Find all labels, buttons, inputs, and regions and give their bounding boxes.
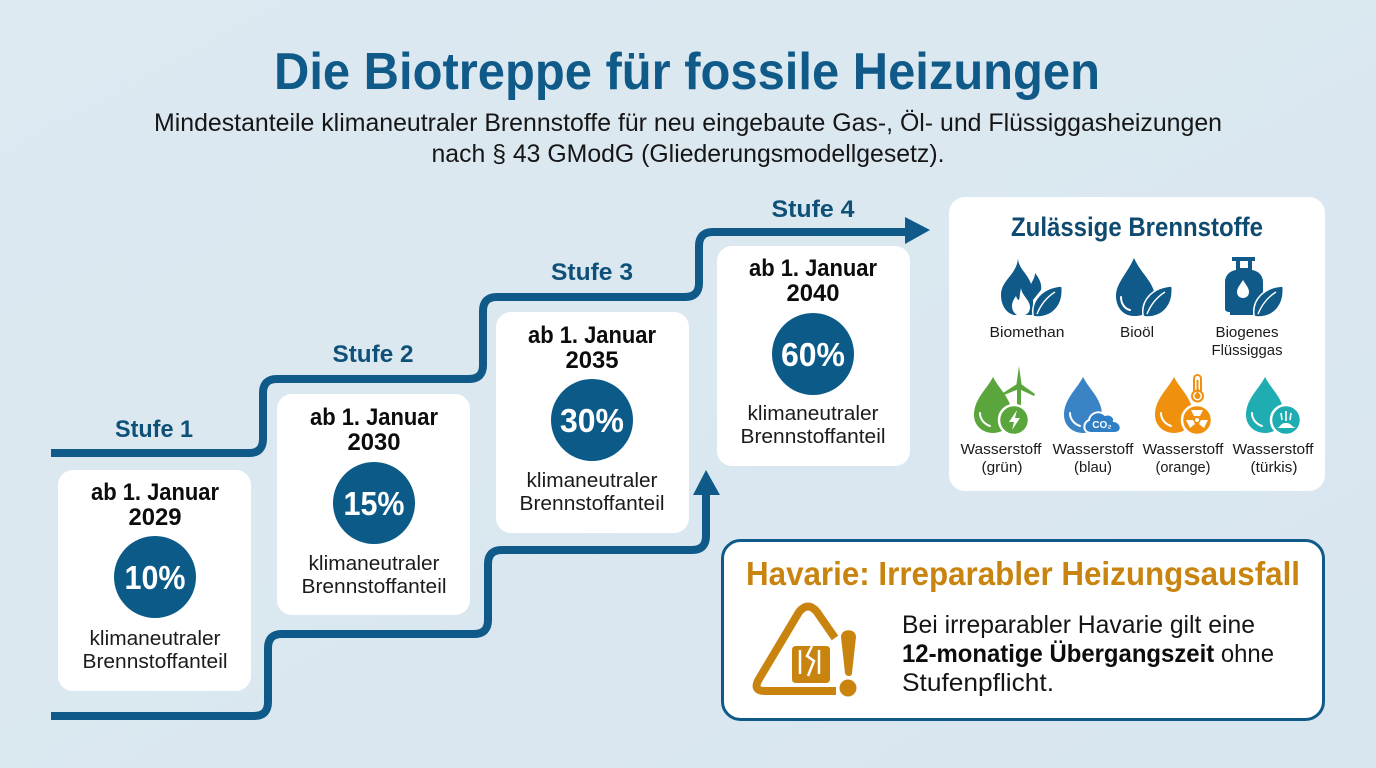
heading: Stufe 3: Stufe 3: [551, 259, 633, 286]
subtitle: Mindestanteile klimaneutraler Brennstoffe für neu eingebaute Gas-, Öl- und Flüssiggasheizungen: [154, 109, 1222, 137]
callout text: 12-monatige Übergangszeit ohne: [902, 639, 1274, 668]
subtitle: [154, 109, 1222, 168]
heading: Stufe 4: Stufe 4: [772, 196, 855, 223]
icon: Wasserstoff blau: [1064, 377, 1121, 433]
panel: Stufe 2 card: [277, 394, 470, 615]
panel: Stufe 3 card: ab 1. Januar: [528, 322, 656, 349]
panel: Stufe 1 card: Brennstoffanteil: [82, 651, 228, 673]
label: (orange): [1156, 460, 1210, 476]
panel: Stufe 4 card: klimaneutraler: [748, 403, 879, 425]
panel: Zulässige Brennstoffe: [949, 197, 1325, 491]
panel: Stufe 1 card: 10%: [124, 559, 186, 596]
panel: Stufe 3 card: [496, 312, 689, 533]
icon: Wasserstoff grün: [974, 366, 1035, 435]
label: Wasserstoff: [1052, 442, 1135, 458]
label: (grün): [982, 460, 1022, 476]
panel: Stufe 3 card: klimaneutraler: [526, 470, 658, 492]
label: Flüssiggas: [1212, 343, 1282, 359]
panel: Stufe 4 card: Brennstoffanteil: [740, 426, 886, 448]
callout text: Bei irreparabler Havarie gilt eine: [902, 611, 1255, 639]
callout text: Stufenpflicht.: [902, 669, 1054, 697]
panel: Stufe 3 card: 30%: [560, 402, 624, 439]
panel: Stufe 4 card: ab 1. Januar: [749, 255, 877, 282]
icon: warning triangle with broken radiator: [757, 606, 856, 696]
icon: Wasserstoff orange: [1155, 375, 1212, 435]
icon: Wasserstoff türkis: [1246, 377, 1301, 435]
upper stair arrow: [51, 217, 930, 453]
panel: Stufe 4 card: [717, 246, 910, 466]
panel: Stufe 1 card: [58, 470, 251, 691]
label: Biogenes: [1216, 325, 1278, 341]
icon: Biogenes Flüssiggas: [1225, 257, 1283, 317]
icon: Wasserstoff blau: CO₂: [1092, 420, 1112, 431]
panel heading: Zulässige Brennstoffe: [1011, 212, 1263, 242]
lower stair arrow: [51, 470, 720, 716]
panel: Stufe 3 card: 2035: [566, 347, 618, 374]
panel: Stufe 1 card: klimaneutraler: [90, 628, 221, 650]
icon: Bioöl: [1116, 258, 1172, 317]
panel: Stufe 4 card: 60%: [781, 336, 845, 373]
callout: Havarie: [722, 540, 1324, 720]
label: (türkis): [1250, 460, 1298, 476]
panel: Stufe 2 card: 2030: [348, 429, 400, 456]
callout heading: Havarie: Irreparabler Heizungsausfall: [746, 555, 1300, 592]
panel: Stufe 2 card: klimaneutraler: [308, 553, 440, 575]
panel: Stufe 1 card: 2029: [128, 504, 182, 531]
subtitle: nach § 43 GModG (Gliederungsmodellgesetz).: [432, 140, 944, 168]
label: Wasserstoff: [1232, 442, 1315, 458]
panel: Stufe 2 card: ab 1. Januar: [310, 404, 438, 431]
icon: Biomethan: [1001, 258, 1062, 317]
title: Die Biotreppe für fossile Heizungen: [274, 43, 1100, 101]
panel: Stufe 3 card: Brennstoffanteil: [520, 493, 664, 515]
label: Wasserstoff: [1142, 442, 1225, 458]
panel: Stufe 1 card: ab 1. Januar: [91, 479, 219, 506]
heading: Stufe 2: Stufe 2: [332, 341, 414, 368]
panel: Stufe 2 card: 15%: [344, 485, 404, 522]
label: Bioöl: [1120, 325, 1154, 341]
panel: Stufe 2 card: Brennstoffanteil: [302, 576, 446, 598]
label: Wasserstoff: [960, 442, 1043, 458]
panel: Stufe 4 card: 2040: [786, 280, 840, 307]
callout text: [902, 611, 1274, 697]
label: (blau): [1074, 460, 1112, 476]
label: Biomethan: [990, 325, 1064, 341]
heading: Stufe 1: Stufe 1: [115, 416, 193, 443]
